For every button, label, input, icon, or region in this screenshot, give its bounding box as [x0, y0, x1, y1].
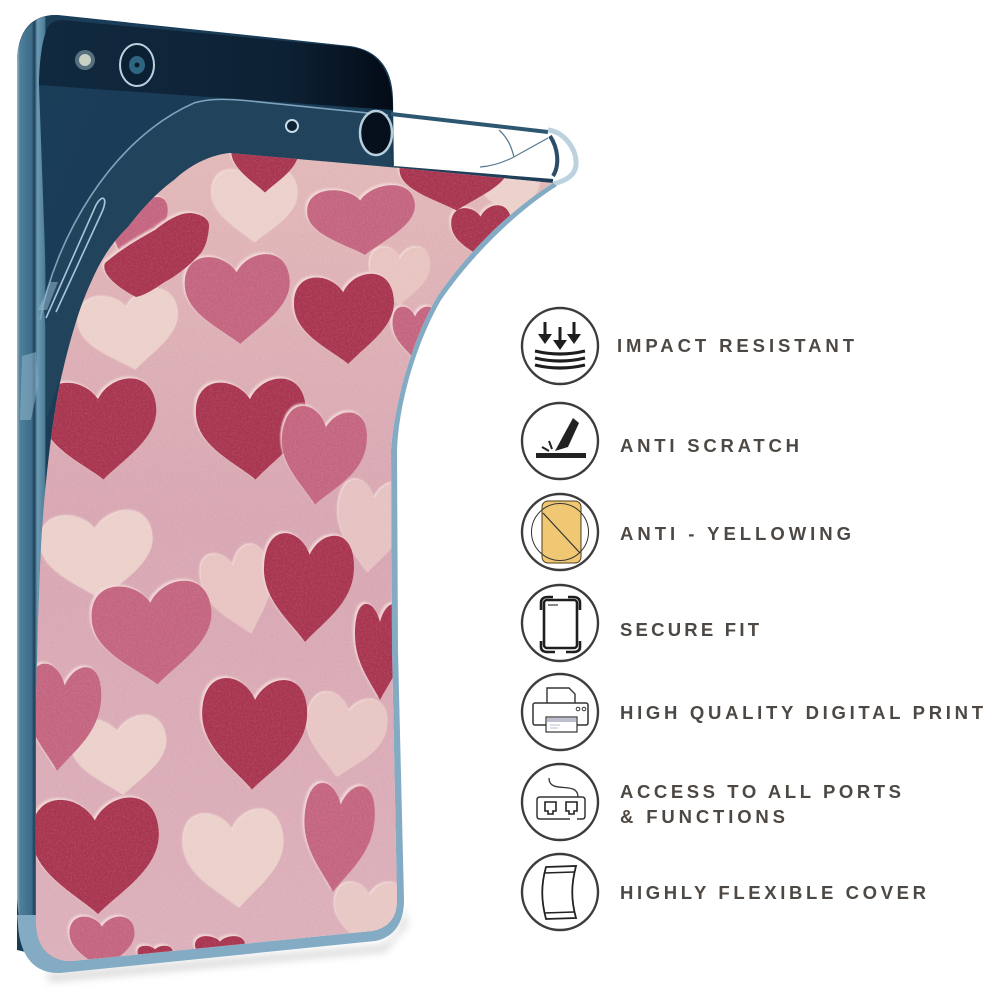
paint texture [36, 154, 509, 959]
case bottom rail [394, 168, 553, 181]
feature: anti yellowing [522, 494, 851, 570]
pale hearts [39, 167, 540, 950]
phone body [17, 15, 394, 960]
side button highlights [20, 282, 58, 420]
feature: high quality digital print [522, 674, 984, 750]
case top right corner [548, 130, 576, 184]
mid pink heart overlapping dark heart [279, 402, 368, 504]
case hole small [286, 120, 298, 132]
case bottom and side rim [17, 183, 557, 973]
feature: highly flexible cover [522, 854, 926, 930]
feature: anti scratch: ANTI SCRATCH [620, 435, 799, 456]
case camera ring [360, 111, 392, 155]
feature: access to all ports and functions: ACCESS TO ALL PORTS [620, 781, 901, 802]
feature: secure fit [522, 585, 760, 661]
feature: access to all ports and functions [522, 764, 901, 840]
mid pink hearts, back layer [20, 183, 438, 969]
dark red hearts [31, 130, 514, 965]
dark glass camera panel [38, 20, 393, 110]
printed heart artwork [20, 130, 570, 970]
side button bulge [46, 198, 105, 318]
camera lens [120, 44, 154, 86]
case frame [20, 99, 576, 420]
case top rail [391, 114, 548, 132]
case shadow [45, 905, 408, 982]
feature: impact resistant: IMPACT RESISTANT [617, 335, 855, 356]
case outer edge [40, 99, 388, 320]
feature: highly flexible cover: HIGHLY FLEXIBLE COVER [620, 882, 926, 903]
flash [75, 50, 95, 70]
feature: secure fit: SECURE FIT [620, 619, 760, 640]
phone side strip [17, 15, 58, 960]
feature: high quality digital print: HIGH QUALITY DIGITAL PRINT [620, 702, 984, 723]
opening diagonal line [480, 130, 548, 167]
feature: anti scratch [522, 403, 799, 479]
feature: anti yellowing: ANTI - YELLOWING [620, 523, 851, 544]
feature: impact resistant [522, 308, 855, 384]
feature: access to all ports and functions: & FUNCTIONS [620, 806, 785, 827]
